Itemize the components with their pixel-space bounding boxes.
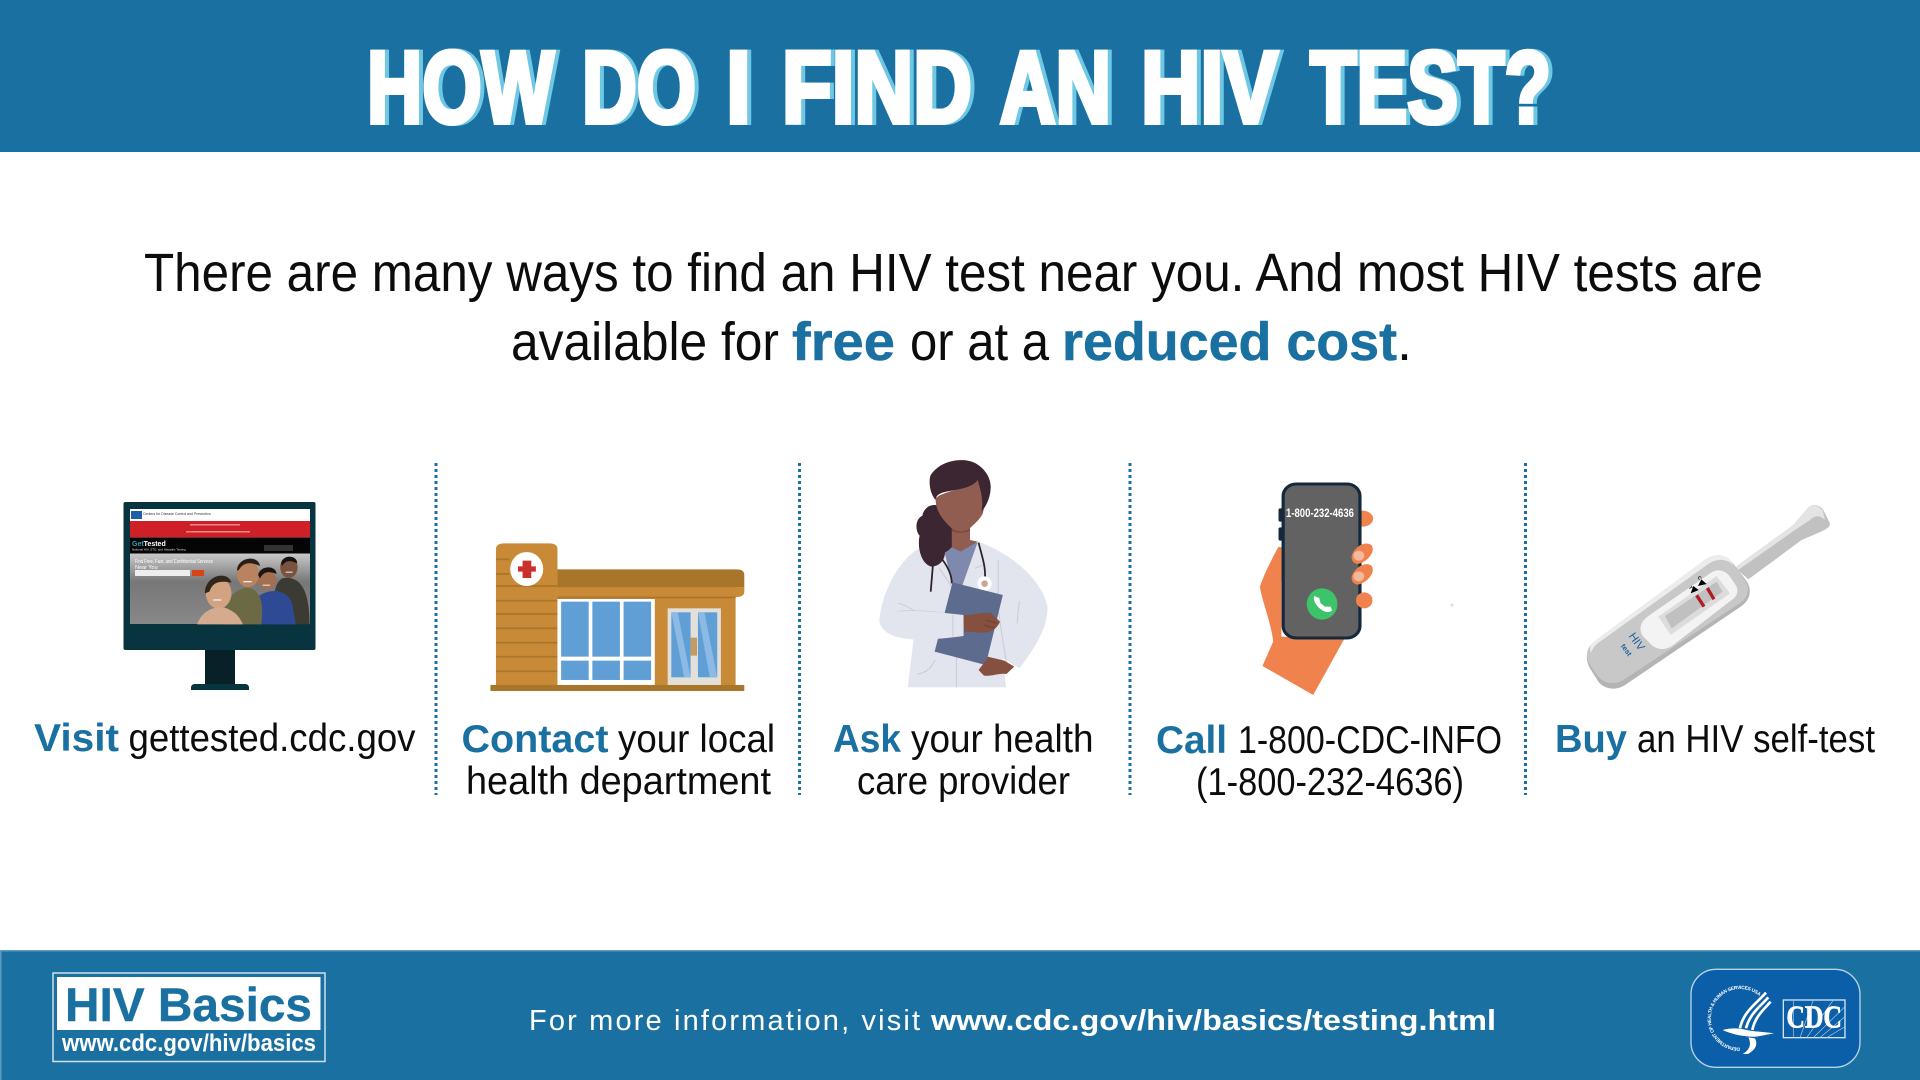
intro text: available for	[511, 312, 779, 372]
label: buy: an HIV self-test	[1637, 718, 1875, 761]
intro text: reduced cost	[1062, 312, 1397, 372]
icon: phone in hand	[1260, 484, 1373, 695]
icon: computer monitor: Find Free, Fast, and Confidential Services	[135, 559, 213, 565]
label: buy	[1555, 718, 1875, 761]
panel: call	[1156, 484, 1502, 804]
label: buy: Buy	[1555, 718, 1627, 761]
title: HOW	[367, 30, 555, 144]
icon: doctor	[879, 460, 1048, 687]
panel: ask provider	[833, 460, 1094, 803]
footer link text: www.cdc.gov/hiv/basics/testing.html	[930, 1005, 1496, 1037]
intro text: or at a	[910, 312, 1050, 372]
title: AN	[1000, 30, 1111, 144]
icon: computer monitor: Near You	[135, 565, 158, 571]
icon: HIV self-test device: T	[1688, 585, 1694, 590]
label: ask: care provider	[857, 760, 1070, 803]
logo: HHS and CDC: CDC	[1786, 999, 1842, 1034]
logo: HIV Basics: www.cdc.gov/hiv/basics	[61, 1030, 316, 1057]
logo: HHS and CDC: DEPARTMENT OF HEALTH & HUMAN SERVICES USA	[1708, 986, 1760, 1051]
icon: HIV self-test device	[1587, 505, 1830, 689]
label: visit: Visit	[34, 717, 119, 760]
icon: HIV self-test device: test	[1619, 642, 1634, 658]
panel: buy self-test	[1555, 505, 1875, 761]
label: contact: Contact	[462, 718, 609, 761]
icon: HIV self-test device: C	[1696, 575, 1703, 581]
title: TEST?	[1310, 30, 1551, 144]
logo: HIV Basics	[53, 973, 325, 1062]
title: FIND	[782, 30, 972, 144]
label: call: (1-800-232-4636)	[1196, 761, 1464, 804]
label: call	[1156, 719, 1502, 804]
icon: computer monitor: National HIV, STD, and Hepatitis Testing	[132, 548, 186, 552]
label: ask: your health	[911, 718, 1094, 761]
footer link text	[529, 1005, 1496, 1037]
label: contact: your local	[618, 718, 775, 761]
label: ask: Ask	[833, 718, 901, 761]
header band with title	[0, 0, 1920, 152]
intro text	[144, 243, 1763, 372]
logo: HIV Basics: HIV Basics	[65, 978, 312, 1031]
icon: computer monitor: Centers for Disease Control and Prevention	[143, 512, 211, 516]
label: call: Call	[1156, 719, 1227, 762]
title	[367, 30, 1551, 144]
label: ask	[833, 718, 1094, 803]
footer band	[0, 950, 1920, 1080]
footer link text: For more information, visit	[529, 1005, 920, 1037]
intro text: There are many ways to find an HIV test near you. And most HIV tests are	[144, 243, 1763, 303]
panel: visit website	[34, 502, 416, 760]
title: DO	[582, 30, 696, 144]
intro text: free	[792, 312, 895, 372]
icon: clinic building	[490, 543, 744, 691]
icon: HIV self-test device: HIV	[1626, 631, 1647, 654]
intro text: .	[1397, 312, 1412, 372]
icon: computer monitor	[124, 502, 316, 690]
label: call: 1-800-CDC-INFO	[1238, 719, 1502, 762]
label: contact: health department	[466, 760, 771, 803]
title: HIV	[1141, 30, 1278, 144]
label: contact	[462, 718, 775, 803]
label: visit: gettested.cdc.gov	[128, 717, 416, 760]
icon: phone in hand: 1-800-232-4636	[1286, 508, 1354, 520]
panel: contact health department	[462, 543, 775, 803]
title: I	[726, 30, 751, 144]
logo: HHS and CDC	[1690, 968, 1861, 1068]
icon: computer monitor: GetTested	[132, 541, 166, 548]
